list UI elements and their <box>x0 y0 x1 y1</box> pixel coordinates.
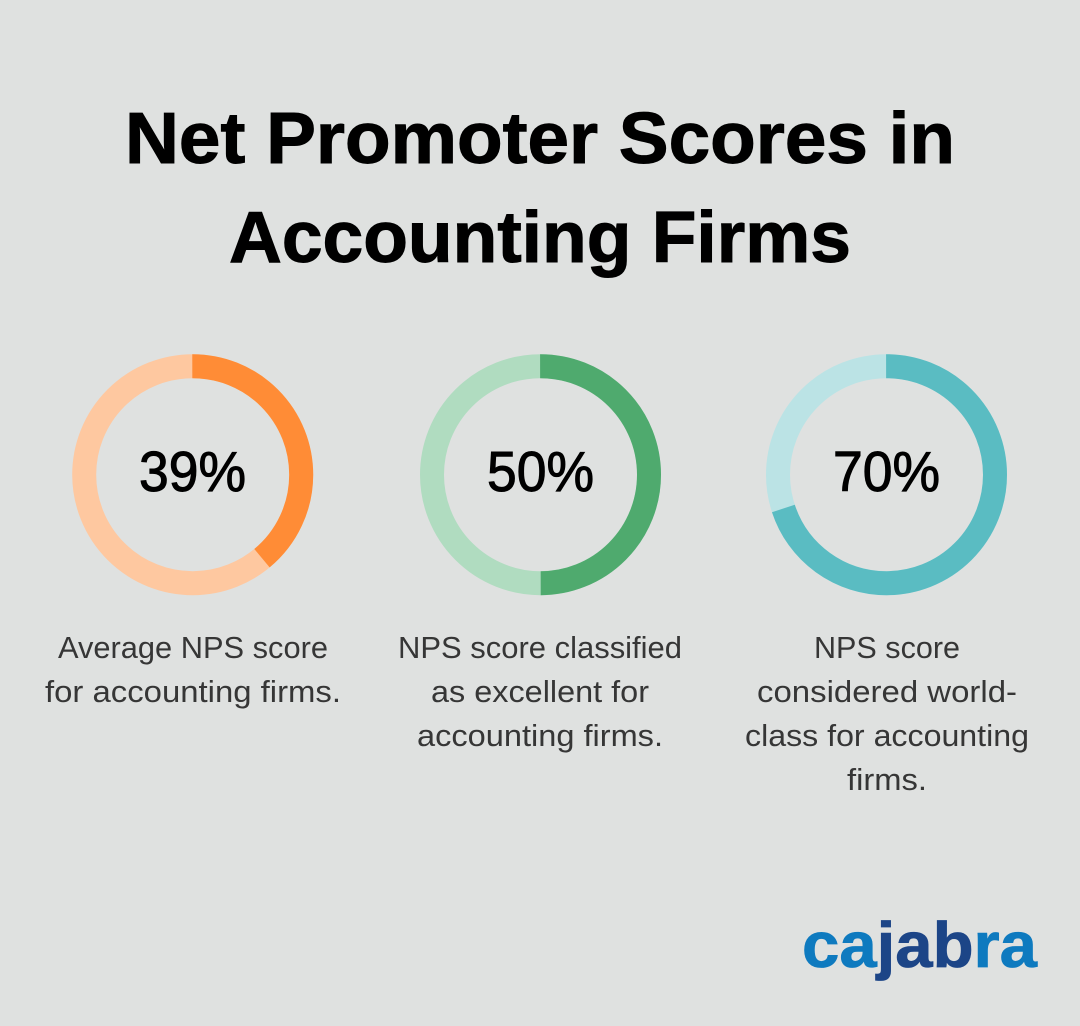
description: average: Average NPS score <box>58 630 328 665</box>
description: world-class: firms. <box>847 762 927 797</box>
description: average <box>45 630 341 709</box>
description: average: for accounting firms. <box>45 674 341 709</box>
description: world-class: NPS score <box>814 630 960 665</box>
donut chart: 39% <box>84 366 301 583</box>
description: excellent: as excellent for <box>431 674 649 709</box>
title: Accounting Firms <box>229 198 851 278</box>
panel: 39% average NPS <box>45 366 341 709</box>
description: world-class: considered world- <box>757 674 1017 709</box>
panel: 70% world-class NPS <box>745 366 1029 797</box>
description: excellent: accounting firms. <box>417 718 663 753</box>
donut chart: 50% <box>432 366 649 583</box>
description: world-class <box>745 630 1029 797</box>
description: world-class: class for accounting <box>745 718 1029 753</box>
value: 50%: 50% <box>487 440 594 504</box>
value: 39%: 39% <box>139 440 246 504</box>
description: excellent: NPS score classified <box>398 630 682 665</box>
description: excellent <box>398 630 682 753</box>
logo: cajabra: cajabra <box>802 909 1037 981</box>
value: 70%: 70% <box>833 440 940 504</box>
title: Net Promoter Scores in <box>125 99 955 179</box>
panel: 50% excellent NPS <box>398 366 682 753</box>
donut chart: 70% <box>778 366 995 583</box>
title <box>125 99 955 278</box>
